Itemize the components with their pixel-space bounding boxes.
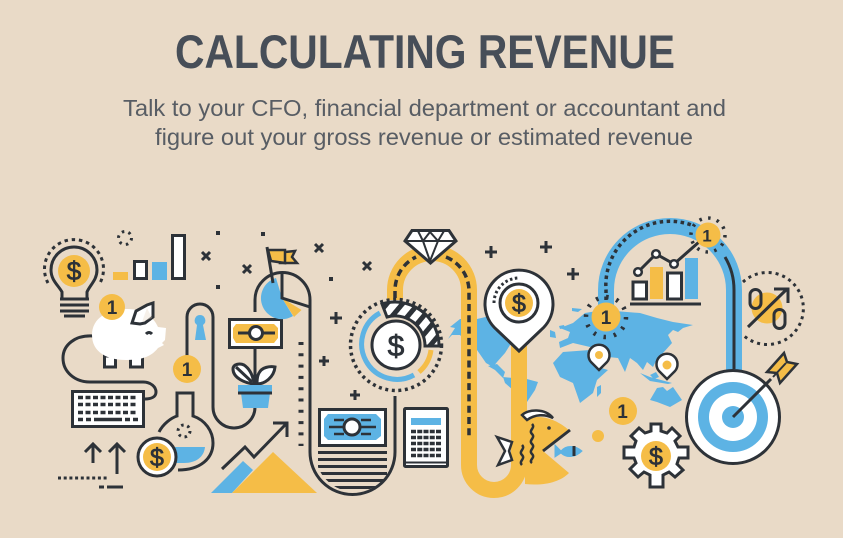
bar chart with line — [630, 242, 701, 304]
icon: dollar dial — [350, 300, 442, 390]
icon: coin with rays on map: 1 — [601, 308, 612, 329]
icon: keyboard — [72, 392, 144, 426]
icon: big fish — [497, 410, 570, 485]
icon: map pin with dollar: $ — [512, 290, 526, 318]
icon: target with arrow — [686, 353, 797, 464]
dotted column — [298, 342, 304, 446]
icon: dotted circle — [118, 232, 132, 244]
icon: coin with rays on map — [586, 297, 626, 337]
icon: light bulb: $ — [67, 256, 82, 286]
icon: gear with dollar — [624, 424, 688, 487]
subtitle — [123, 95, 726, 150]
tube with keyhole — [173, 304, 255, 428]
subtitle: figure out your gross revenue or estimated revenue — [155, 124, 693, 150]
icon: diamond — [405, 230, 456, 263]
world map — [448, 308, 693, 407]
dashes on yellow track — [395, 257, 469, 439]
icon: growth arrow and mountains — [211, 423, 317, 493]
icon: banknote and stripes — [318, 410, 387, 488]
decorative marks: crosses and dots — [202, 231, 579, 400]
icon: gear with dollar: $ — [649, 443, 663, 471]
icon: dollar dial: $ — [388, 330, 405, 363]
icon: piggy bank: 1 — [107, 298, 118, 319]
coins — [592, 397, 637, 442]
icon: percent — [743, 272, 803, 345]
icon: calculator — [404, 408, 448, 466]
icon: coin with rays on arch — [691, 218, 725, 252]
coins: 1 — [617, 402, 628, 423]
icon: piggy bank — [92, 294, 166, 367]
bar chart: small rising bars — [113, 236, 184, 280]
icon: map pins — [589, 345, 678, 379]
icon: map pin with dollar — [485, 270, 553, 351]
icon: money plant — [230, 320, 282, 408]
icon: light bulb — [44, 240, 104, 316]
icon: blue arch — [606, 221, 734, 372]
icon: flask with coin: $ — [150, 444, 164, 472]
icon: yellow track — [395, 253, 519, 490]
pie chart and long tube — [255, 247, 395, 494]
dashed lines — [58, 478, 123, 487]
icon: coin with rays on arch: 1 — [702, 226, 712, 246]
icon: small fish — [555, 445, 582, 457]
title: CALCULATING REVENUE — [175, 25, 675, 78]
tube with keyhole: 1 — [182, 360, 193, 381]
cable from piggy bank to keyboard — [63, 336, 156, 399]
icon: flask with coin — [138, 393, 213, 476]
subtitle: Talk to your CFO, financial department or accountant and — [123, 95, 726, 121]
icon: up arrows — [85, 444, 125, 474]
